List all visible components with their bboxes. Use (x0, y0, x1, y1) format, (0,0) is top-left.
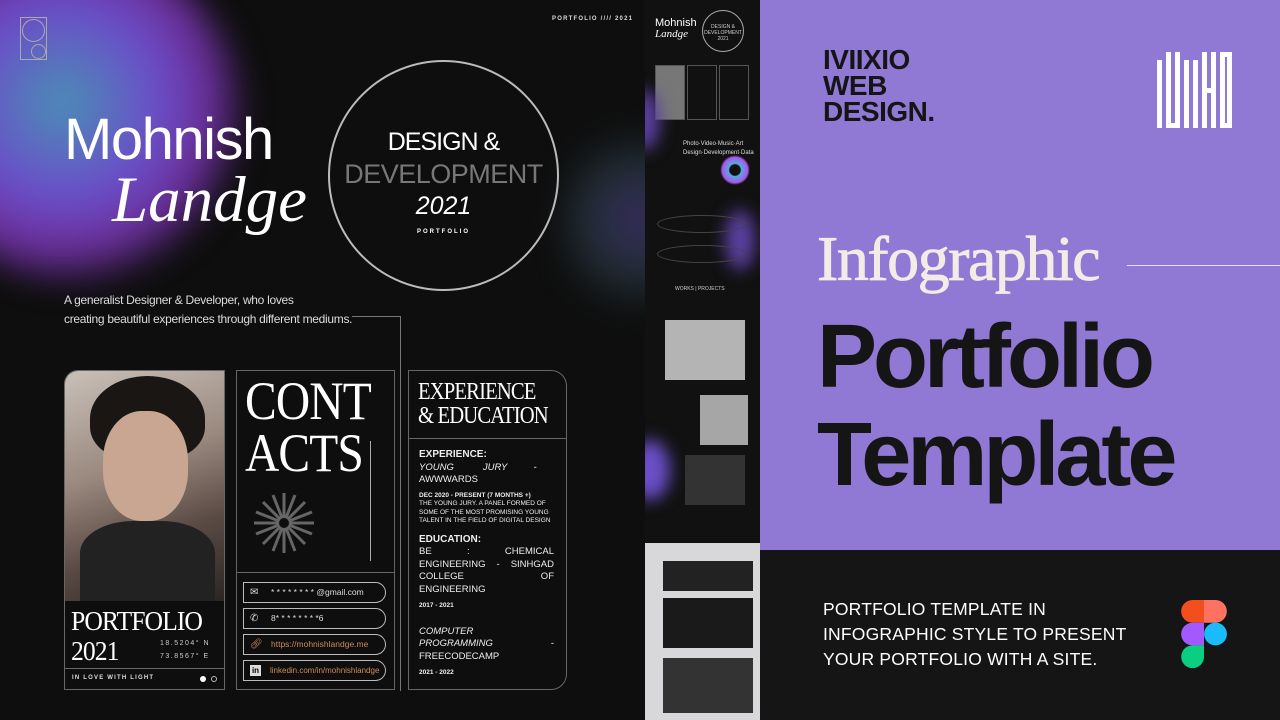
card: experience & education: EXPERIENCE: (419, 449, 487, 460)
thumbnail strip: Photo·Video·Music·Art (683, 141, 743, 147)
circle badge: DEVELOPMENT (344, 159, 543, 189)
card: experience & education: PROGRAMMING (419, 638, 493, 649)
card: experience & education: EXPERIENCE (418, 379, 536, 405)
card: experience & education: EDUCATION: (419, 534, 481, 544)
card: experience & education: COMPUTER (419, 626, 473, 636)
tagline: creating beautiful experiences through different mediums. (64, 312, 352, 326)
card: experience & education: AWWWARDS ENGINEERING (419, 474, 486, 594)
card: experience & education: & EDUCATION (418, 403, 548, 429)
text: linkedin.com/in/mohnishlandge (270, 666, 379, 675)
thumbnail strip: WORKS | PROJECTS (675, 286, 725, 292)
portfolio 2021 (71, 606, 202, 666)
portfolio 2021: 2021 (71, 636, 118, 666)
circle badge: DESIGN & (388, 128, 499, 156)
text: in (252, 666, 259, 675)
contact pills: ✉ (250, 587, 258, 598)
description: PORTFOLIO TEMPLATE IN (823, 599, 1046, 619)
name: Mohnish (64, 107, 273, 172)
card: experience & education: FREECODECAMP (419, 650, 499, 662)
card: contacts: ACTS (245, 423, 363, 483)
portfolio 2021: PORTFOLIO (71, 606, 202, 636)
thumbnail strip: Mohnish (655, 17, 697, 29)
contact pills: * * * * * * * * @gmail.com (271, 587, 364, 597)
photo (65, 371, 225, 601)
card: contacts: CONT (245, 371, 371, 431)
thumbnail strip: DESIGN & (711, 24, 735, 30)
card: photo: 73.8567° E (160, 653, 210, 660)
card: photo: IN LOVE WITH LIGHT (72, 675, 154, 681)
description: YOUR PORTFOLIO WITH A SITE. (823, 649, 1097, 669)
thumbnail strip: Landge (655, 28, 688, 40)
text: 8* * * * * * * *6 (271, 613, 323, 623)
name (64, 107, 307, 236)
brand text (823, 44, 935, 127)
card: contacts (236, 370, 395, 690)
card: experience & education: YOUNG JURY - (419, 462, 537, 472)
main title: Portfolio (817, 307, 1151, 407)
card: experience & education: - (551, 638, 554, 649)
main title: Template (817, 405, 1173, 505)
icon: starburst (254, 493, 314, 553)
card: experience & education (408, 370, 567, 690)
card: experience & education: DEC 2020 - PRESENT (7 MONTHS +) (419, 492, 531, 498)
text: 🔗︎ (250, 639, 263, 650)
thumbnail strip (645, 0, 760, 720)
main title (817, 307, 1174, 505)
card: experience & education: BE : CHEMICAL ENGINEERING - SINHGAD COLLEGE OF (419, 546, 554, 582)
name: Landge (112, 164, 307, 236)
thumbnail strip: 2021 (717, 36, 729, 42)
top tag: PORTFOLIO //// 2021 (552, 16, 633, 22)
brand logo (1157, 52, 1232, 128)
right purple panel (760, 0, 1280, 550)
contact pills (243, 582, 386, 603)
description (823, 599, 1126, 669)
text: https://mohnishlandge.me (271, 639, 368, 649)
card: experience & education: 2017 - 2021 (419, 602, 454, 609)
thumbnail strip: Design·Development·Data (683, 150, 754, 156)
card: photo (64, 370, 225, 690)
background blobs (0, 0, 645, 308)
infographic heading: Infographic (817, 223, 1099, 294)
tagline: A generalist Designer & Developer, who loves (64, 293, 294, 307)
logo icon (20, 17, 47, 60)
circle badge: PORTFOLIO (417, 229, 470, 235)
text: ✆ (250, 613, 258, 624)
brand text: IVIIXIO (823, 44, 910, 75)
card: experience & education: THE YOUNG JURY. A PANEL FORMED OF SOME OF THE MOST PROMISING YOUNG TALENT IN THE FIELD OF DIGITAL DESIGN (419, 500, 550, 524)
description: INFOGRAPHIC STYLE TO PRESENT (823, 624, 1126, 644)
circle badge (328, 60, 559, 291)
thumbnail strip: DEVELOPMENT (704, 30, 742, 36)
icon: figma (1181, 600, 1227, 668)
brand text: DESIGN. (823, 96, 935, 127)
brand text: WEB (823, 70, 887, 101)
bottom dark panel (760, 550, 1280, 720)
card: photo: 18.5204° N (160, 640, 210, 647)
tagline (64, 293, 352, 326)
circle badge: 2021 (416, 192, 471, 220)
card: experience & education: 2021 - 2022 (419, 669, 454, 676)
